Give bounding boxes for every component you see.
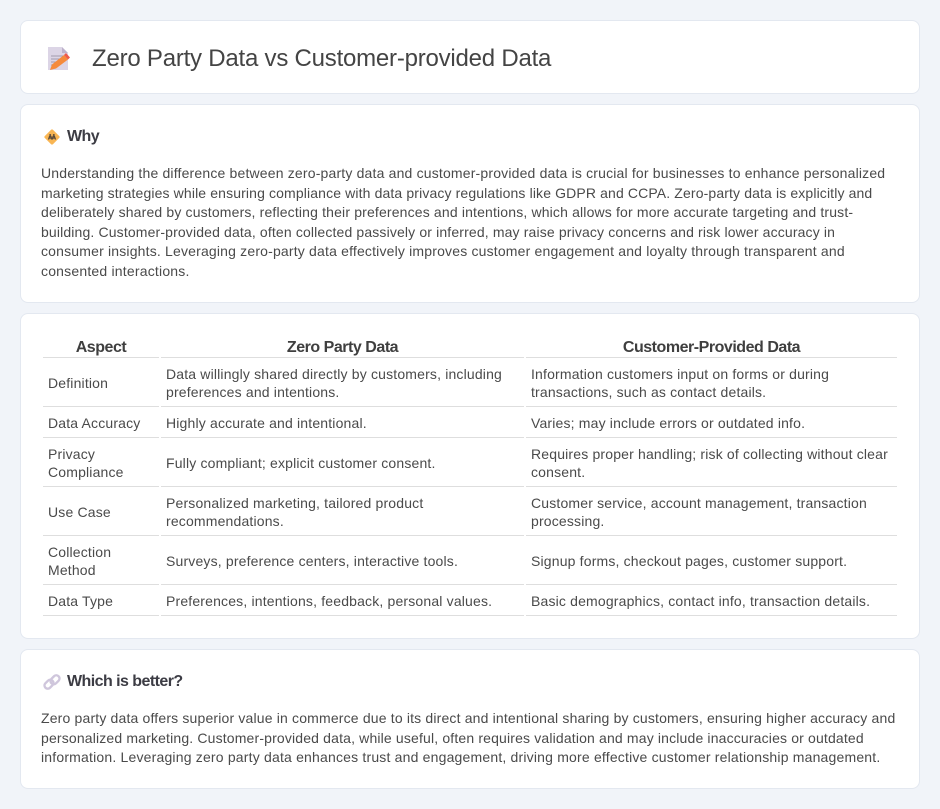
table header: customer-provided data: Customer-Provided Data [623,339,800,356]
row: privacy compliance: Requires proper handling; risk of collecting without clear [531,446,888,462]
row: data accuracy: Data Accuracy [48,415,140,431]
row: definition [48,366,829,400]
row: privacy compliance: Compliance [48,464,124,480]
text block: why: Understanding the difference between zero-party data and customer-provided data is crucial for businesses to enhance personalized [41,165,885,181]
text block: which is better: Zero party data offers superior value in commerce due to its direct and intentional sharing by customers, ensuring higher accuracy and [41,710,895,726]
row: collection method [48,544,847,578]
table header: zero party data: Zero Party Data [287,339,398,356]
row: use case: Customer service, account management, transaction [531,495,867,511]
row: data type: Data Type [48,593,113,609]
panel: which is better [20,649,920,789]
row: data accuracy: Varies; may include errors or outdated info. [531,415,805,431]
table header: aspect: Aspect [76,339,126,356]
row: collection method: Method [48,562,96,578]
text block: why: building. Customer-provided data, often collected passively or inferred, may raise privacy concerns and risk lower accuracy in [41,224,835,240]
row: data type [48,593,870,609]
row: privacy compliance: consent. [531,464,585,480]
icon: link [43,674,61,690]
row: privacy compliance: Fully compliant; explicit customer consent. [166,455,436,471]
row: use case: Personalized marketing, tailored product [166,495,423,511]
text block: which is better: personalized marketing. Customer-provided data, while useful, often requires validation and may include inaccuracies or outdated [41,730,864,746]
row: use case: recommendations. [166,513,284,529]
header panel [20,20,920,94]
row: privacy compliance: Privacy [48,446,95,462]
row: definition: Data willingly shared directly by customers, including [166,366,502,382]
text block: why [41,165,885,279]
row: collection method: Signup forms, checkout pages, customer support. [531,553,847,569]
row: collection method: Collection [48,544,111,560]
text block: why: deliberately shared by customers, reflecting their preferences and intentions, which allows for more accurate targeting and trust- [41,204,853,220]
heading: why: Why [67,128,99,145]
row: use case [48,495,867,529]
text block: which is better [41,710,895,765]
row: data accuracy [48,415,805,431]
row: data accuracy: Highly accurate and intentional. [166,415,367,431]
row: use case: processing. [531,513,604,529]
row: privacy compliance [48,446,888,480]
row: data type: Preferences, intentions, feedback, personal values. [166,593,492,609]
panel: comparison table [20,313,920,639]
text block: why: consented interactions. [41,263,190,279]
row: use case: Use Case [48,504,111,520]
panel: why [20,104,920,303]
text block: which is better: information. Leveraging zero party data enhances trust and engagement, driving more effective customer relationship management. [41,749,880,765]
row: definition: Definition [48,375,108,391]
text block: why: marketing strategies while ensuring compliance with data privacy regulations like GDPR and CCPA. Zero-party data is explicitly and [41,185,872,201]
title: Zero Party Data vs Customer-provided Data [92,45,551,72]
text block: why: consumer insights. Leveraging zero-party data effectively improves customer engagement and loyalty through transparent and [41,243,845,259]
row: data type: Basic demographics, contact info, transaction details. [531,593,870,609]
icon: diamond sign [44,129,60,145]
icon: document with pencil [48,47,70,70]
row: definition: preferences and intentions. [166,384,339,400]
row: collection method: Surveys, preference centers, interactive tools. [166,553,458,569]
row: definition: Information customers input on forms or during [531,366,829,382]
heading: which is better: Which is better? [67,673,183,690]
row: definition: transactions, such as contact details. [531,384,766,400]
